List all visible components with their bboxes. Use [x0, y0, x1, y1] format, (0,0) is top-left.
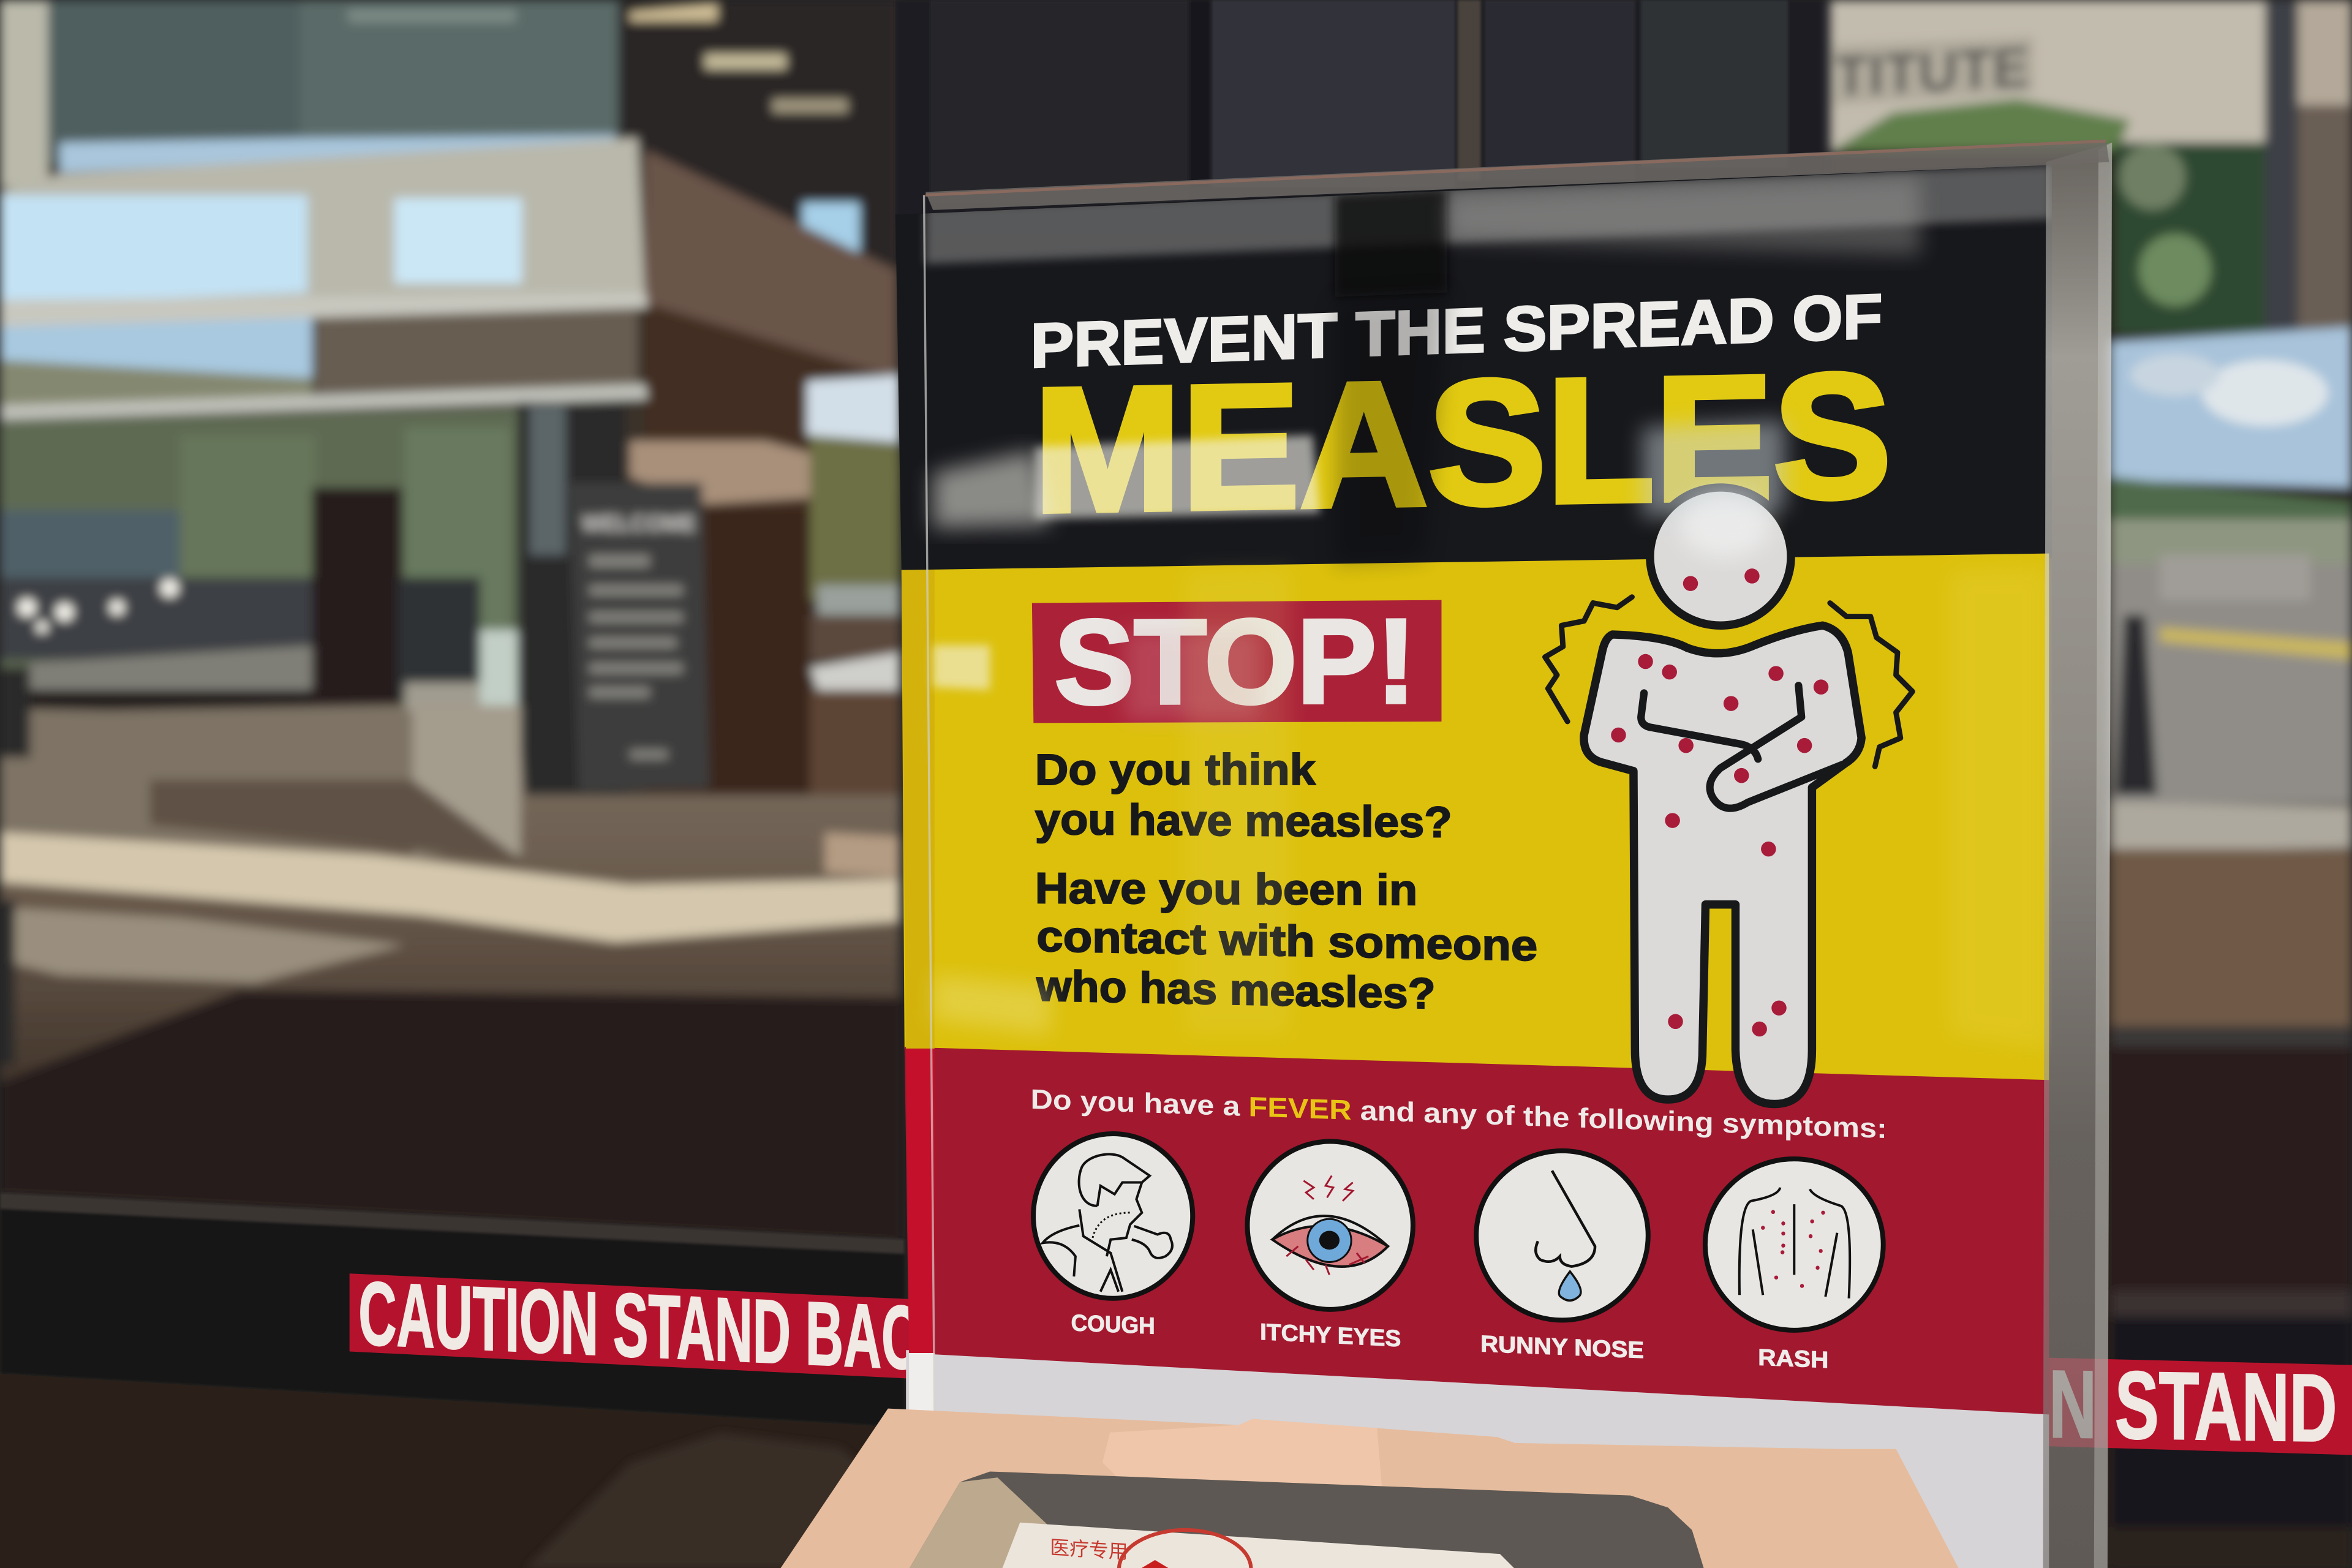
fever question: Do you have a FEVER and any of the following symptoms:	[1030, 1084, 1887, 1144]
box opening	[909, 1471, 1704, 1568]
question text: Have you been in	[1035, 864, 1417, 914]
symptom labels: ITCHY EYES	[1260, 1319, 1401, 1352]
acrylic left edge	[924, 195, 935, 1417]
dark door frame behind the sign	[895, 0, 1833, 263]
icon: itchy eyes	[1247, 1142, 1413, 1310]
welcome sign in reflection: WELCOME	[582, 511, 696, 536]
tissue box with bandage rolls	[780, 1409, 1959, 1568]
left edge strip not covered by the acrylic	[902, 570, 935, 1417]
icon: cough	[1033, 1134, 1193, 1298]
question text: Do you think	[1035, 746, 1316, 794]
icon: runny nose	[1476, 1151, 1648, 1320]
printed measles poster	[895, 162, 2052, 1568]
floor of lobby	[0, 708, 900, 1080]
caution tape	[350, 1263, 919, 1389]
parking lot lights	[18, 579, 178, 633]
symptom labels	[1071, 1310, 1828, 1373]
fever shake lines	[1545, 597, 1912, 766]
blurred lobby reflection, left side	[0, 0, 905, 1568]
heading: measles: MEASLES	[1033, 336, 1891, 549]
acrylic top edge	[925, 140, 2109, 210]
poster black header band	[895, 162, 2052, 571]
caution tape: CAUTION STAND BAC	[358, 1263, 919, 1389]
poster yellow band	[902, 554, 2049, 1083]
acrylic holder	[924, 140, 2112, 1568]
question text	[1035, 746, 1537, 1019]
folded arms	[1641, 685, 1845, 809]
welcome sign in reflection	[570, 483, 709, 791]
heading: prevent the spread of: PREVENT THE SPREAD OF	[1030, 281, 1882, 381]
poster red band	[905, 1047, 2049, 1414]
bandage roll with label: 医疗专用	[1050, 1536, 1128, 1563]
poster white lower margin	[906, 1350, 2049, 1568]
symptom labels: COUGH	[1071, 1310, 1155, 1340]
door rail with caution tape, left	[0, 1193, 919, 1568]
cardboard box	[780, 1409, 1959, 1568]
stop banner: STOP!	[1055, 594, 1416, 729]
figure with rash and fever	[1545, 488, 1912, 1104]
blurred outdoor reflection, right side	[1830, 0, 2352, 1568]
icon: rash	[1705, 1159, 1883, 1330]
body outline	[1584, 625, 1861, 1104]
head	[1650, 488, 1791, 625]
bandage roll with label	[1002, 1523, 1515, 1568]
reflected institute sign: TITUTE	[1834, 35, 2029, 108]
rash spots	[1611, 568, 1828, 1036]
symptom labels: RUNNY NOSE	[1480, 1332, 1644, 1363]
symptom labels: RASH	[1758, 1345, 1828, 1373]
acrylic right edge	[2043, 143, 2112, 1568]
question text: contact with someone	[1036, 913, 1537, 970]
dark lower door panel	[0, 990, 905, 1242]
reflections on the acrylic	[925, 165, 2052, 1050]
question text: you have measles?	[1035, 796, 1452, 847]
question text: who has measles?	[1036, 962, 1436, 1019]
